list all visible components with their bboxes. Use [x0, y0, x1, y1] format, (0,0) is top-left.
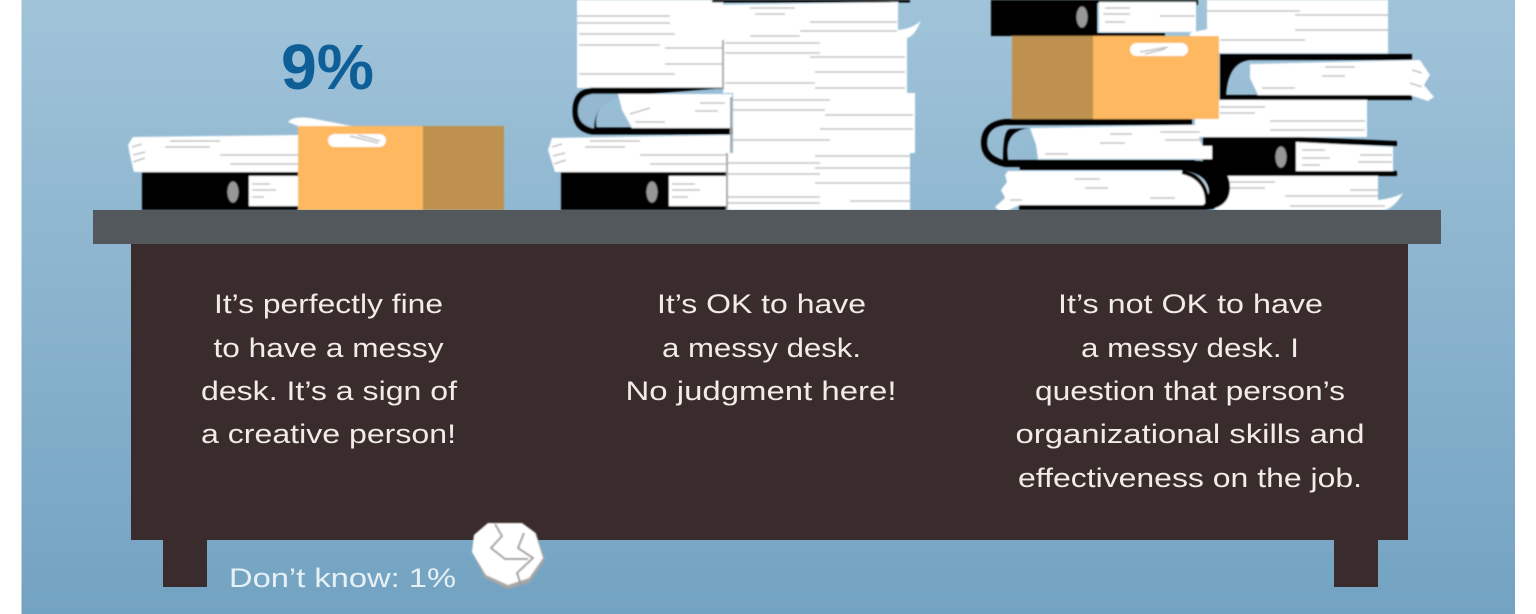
text: perfectly fine: to have a messy	[214, 333, 444, 363]
desk body	[131, 244, 1408, 540]
text: not OK: question that person’s	[1035, 376, 1345, 406]
text: OK to have: a messy desk.	[662, 333, 861, 363]
desk leg left	[163, 540, 207, 587]
rear right paper stack	[1207, 0, 1388, 53]
text: not OK: a messy desk. I	[1081, 333, 1299, 363]
text: perfectly fine: a creative person!	[201, 419, 456, 449]
black binder	[142, 172, 298, 210]
tall right paper stack	[707, 0, 921, 210]
paper stack	[548, 135, 730, 172]
desk top	[93, 210, 1441, 244]
lower curved binder	[995, 161, 1230, 213]
curved binder	[573, 88, 732, 134]
text: not OK: organizational skills and	[1016, 419, 1364, 449]
text: don't know: Don’t know: 1%	[229, 563, 456, 593]
pile: right column	[981, 0, 1434, 213]
pile: middle column	[548, 0, 921, 210]
paper stack	[128, 135, 298, 172]
middle paper stack	[1195, 100, 1367, 137]
text: OK to have: It’s OK to have	[657, 289, 866, 319]
text: not OK: effectiveness on the job.	[1018, 463, 1362, 493]
desk	[93, 210, 1441, 587]
top black binder	[991, 0, 1198, 36]
black binder	[561, 172, 727, 210]
pile: 9% column	[128, 118, 504, 210]
left paper stack	[577, 0, 723, 88]
text: not OK: It’s not OK to have	[1058, 289, 1323, 319]
text: perfectly fine: It’s perfectly fine	[214, 289, 443, 319]
icon: crumpled paper ball	[472, 523, 545, 589]
text: perfectly fine: desk. It’s a sign of	[201, 376, 458, 406]
text: OK to have: No judgment here!	[626, 376, 896, 406]
loose paper behind box	[288, 118, 352, 126]
cardboard box	[1012, 29, 1230, 119]
mid-right black binder	[1203, 137, 1397, 176]
text: perfectly fine	[201, 289, 458, 449]
cardboard box	[298, 126, 504, 210]
text: OK to have	[626, 289, 896, 406]
right curved binder	[1220, 54, 1434, 101]
desk leg right	[1334, 540, 1378, 587]
left curved binder	[981, 119, 1212, 167]
text: not OK	[1016, 289, 1364, 493]
percentage: 9%: 9%	[281, 31, 374, 103]
bottom paper stack	[1215, 176, 1403, 210]
